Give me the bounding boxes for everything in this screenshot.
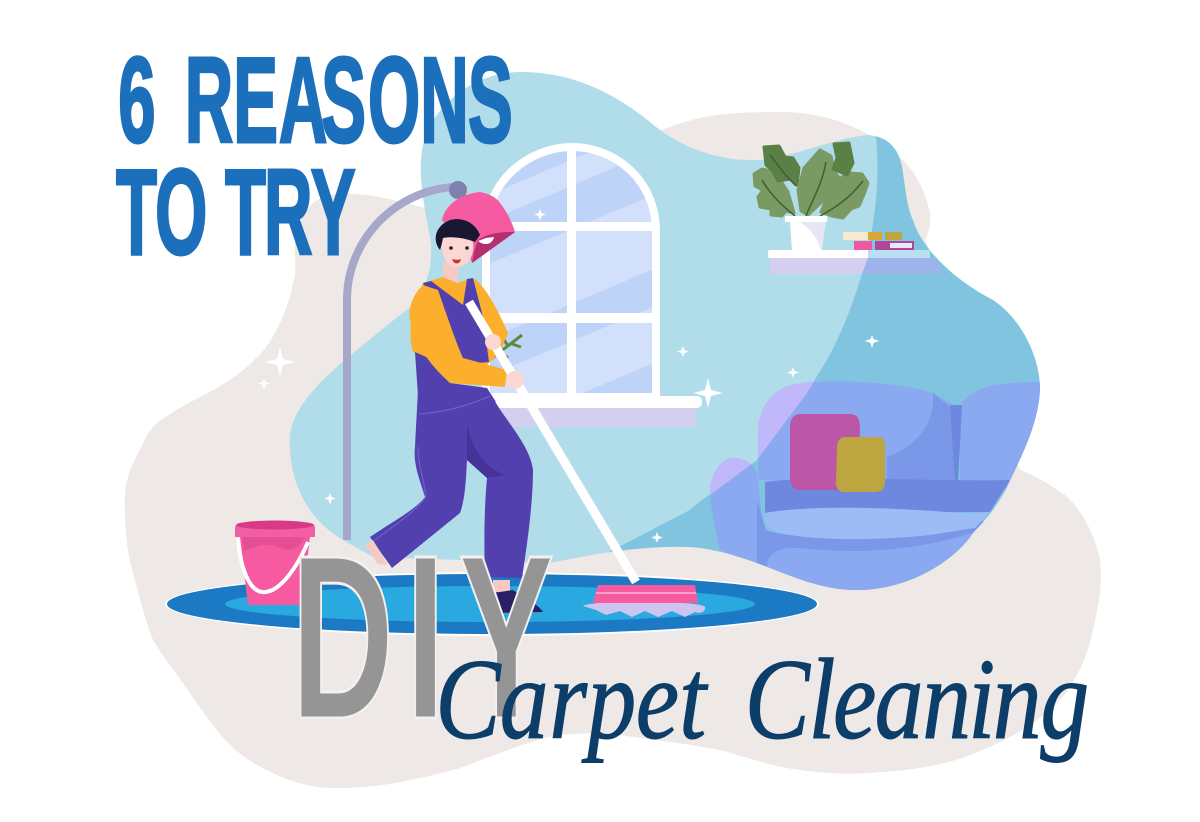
plant leaves (754, 143, 868, 218)
mop (469, 302, 705, 617)
trousers (370, 390, 533, 578)
plant sprig behind arm (484, 335, 522, 362)
neck (443, 262, 460, 283)
books (843, 232, 914, 250)
sofa back (758, 382, 957, 490)
carpet (165, 572, 819, 636)
overalls waist (415, 352, 496, 402)
lower frame (757, 501, 984, 590)
head (442, 234, 473, 267)
heading: 6 reasons to try (116, 32, 513, 280)
heading: DIY: DIY (291, 508, 554, 769)
background: beige blob (125, 112, 1101, 788)
heading: 6 reasons to try: TO TRY (116, 144, 356, 280)
character: man mopping (343, 219, 543, 613)
sleeve (410, 285, 507, 387)
hair (436, 219, 480, 250)
sweater torso (410, 277, 508, 365)
shelf board (768, 250, 930, 258)
cushions (790, 414, 885, 492)
wall shelf with plant and books (754, 143, 943, 274)
hands (485, 334, 501, 350)
lavender overlap in the light zone (710, 382, 814, 495)
sofa arm (710, 458, 767, 565)
pink bucket (235, 520, 315, 605)
sofa (710, 380, 1045, 600)
plant pot (790, 220, 826, 250)
heading: 6 reasons to try: 6 REASONS (118, 32, 513, 168)
sparkles (258, 209, 879, 543)
seat back band (765, 478, 1010, 513)
mop head (593, 585, 698, 603)
overall straps and bib (423, 278, 489, 364)
heading: carpet cleaning: Carpet Cleaning (435, 637, 1089, 764)
front panel (767, 532, 973, 590)
floor lamp (347, 181, 515, 540)
infographic canvas (116, 55, 1101, 788)
mop fringe (583, 602, 705, 617)
room: blue wall blob (290, 72, 1060, 600)
shoes (493, 580, 510, 592)
window (486, 124, 702, 434)
seat cushion (765, 508, 990, 539)
window sill (494, 396, 702, 408)
